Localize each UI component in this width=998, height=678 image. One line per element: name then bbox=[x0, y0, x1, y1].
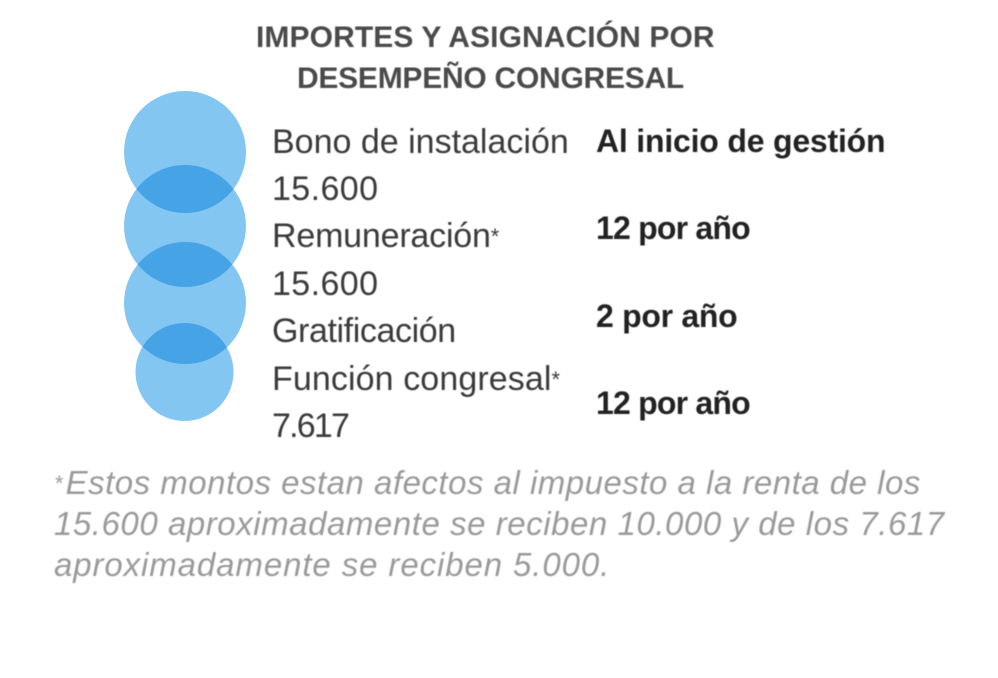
list of amounts bbox=[272, 123, 569, 445]
title: DESEMPEÑO CONGRESAL bbox=[297, 62, 684, 95]
list of frequencies: 12 por año bbox=[596, 210, 750, 246]
list of amounts: 15.600 bbox=[272, 265, 378, 303]
list of amounts: Bono de instalación bbox=[272, 123, 569, 161]
footnote: aproximadamente se reciben 5.000. bbox=[54, 546, 610, 583]
list of frequencies: 12 por año bbox=[596, 385, 750, 421]
title bbox=[256, 20, 715, 95]
list of amounts: Gratificación bbox=[272, 312, 456, 350]
list of amounts: Función congresal* bbox=[272, 360, 560, 398]
list of amounts: Remuneración* bbox=[272, 217, 499, 255]
list of frequencies: Al inicio de gestión bbox=[596, 123, 885, 159]
list of frequencies bbox=[596, 123, 885, 422]
footnote bbox=[54, 464, 946, 584]
list of frequencies: 2 por año bbox=[596, 298, 737, 334]
footnote: *Estos montos estan afectos al impuesto a la renta de los bbox=[54, 464, 921, 501]
footnote: 15.600 aproximadamente se reciben 10.000 y de los 7.617 bbox=[54, 505, 945, 542]
list of amounts: 7.617 bbox=[272, 407, 348, 445]
title: IMPORTES Y ASIGNACIÓN POR bbox=[256, 21, 715, 54]
icon: overlapping blue circles bbox=[124, 91, 246, 421]
list of amounts: 15.600 bbox=[272, 170, 378, 208]
